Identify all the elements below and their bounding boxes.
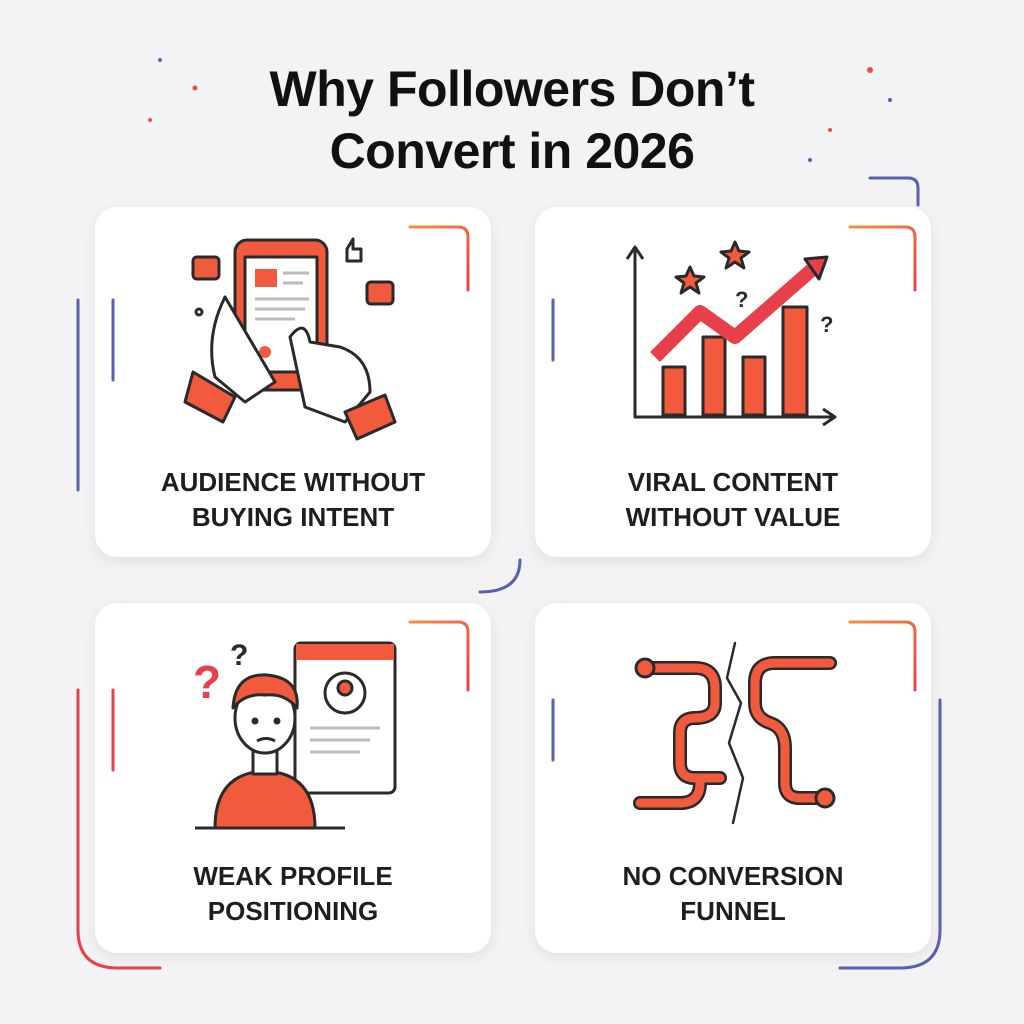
icon: confused person: ?	[230, 639, 248, 672]
label	[161, 467, 425, 532]
panel: viral content without value	[535, 207, 931, 557]
title: Why Followers Don’t	[270, 61, 754, 117]
label: BUYING INTENT	[192, 502, 394, 532]
label: POSITIONING	[208, 896, 378, 926]
title	[270, 61, 754, 179]
panel: weak profile positioning	[95, 603, 491, 953]
icon: broken path	[633, 642, 837, 824]
icon: growth chart	[626, 240, 837, 426]
label	[626, 467, 840, 532]
label: NO CONVERSION	[622, 861, 844, 891]
icon: growth chart: ?	[820, 312, 833, 337]
icon: phone with hand	[184, 237, 396, 440]
icon: confused person: ?	[193, 656, 221, 708]
label: FUNNEL	[680, 896, 786, 926]
label	[622, 861, 844, 926]
label: WEAK PROFILE	[193, 861, 393, 891]
label: WITHOUT VALUE	[626, 502, 840, 532]
title: Convert in 2026	[330, 123, 694, 179]
icon: growth chart: ?	[735, 287, 748, 312]
label	[193, 861, 393, 926]
label: VIRAL CONTENT	[628, 467, 838, 497]
label: AUDIENCE WITHOUT	[161, 467, 425, 497]
panel: no conversion funnel	[535, 603, 931, 953]
panel: audience without buying intent	[95, 207, 491, 557]
icon: confused person	[193, 639, 396, 830]
